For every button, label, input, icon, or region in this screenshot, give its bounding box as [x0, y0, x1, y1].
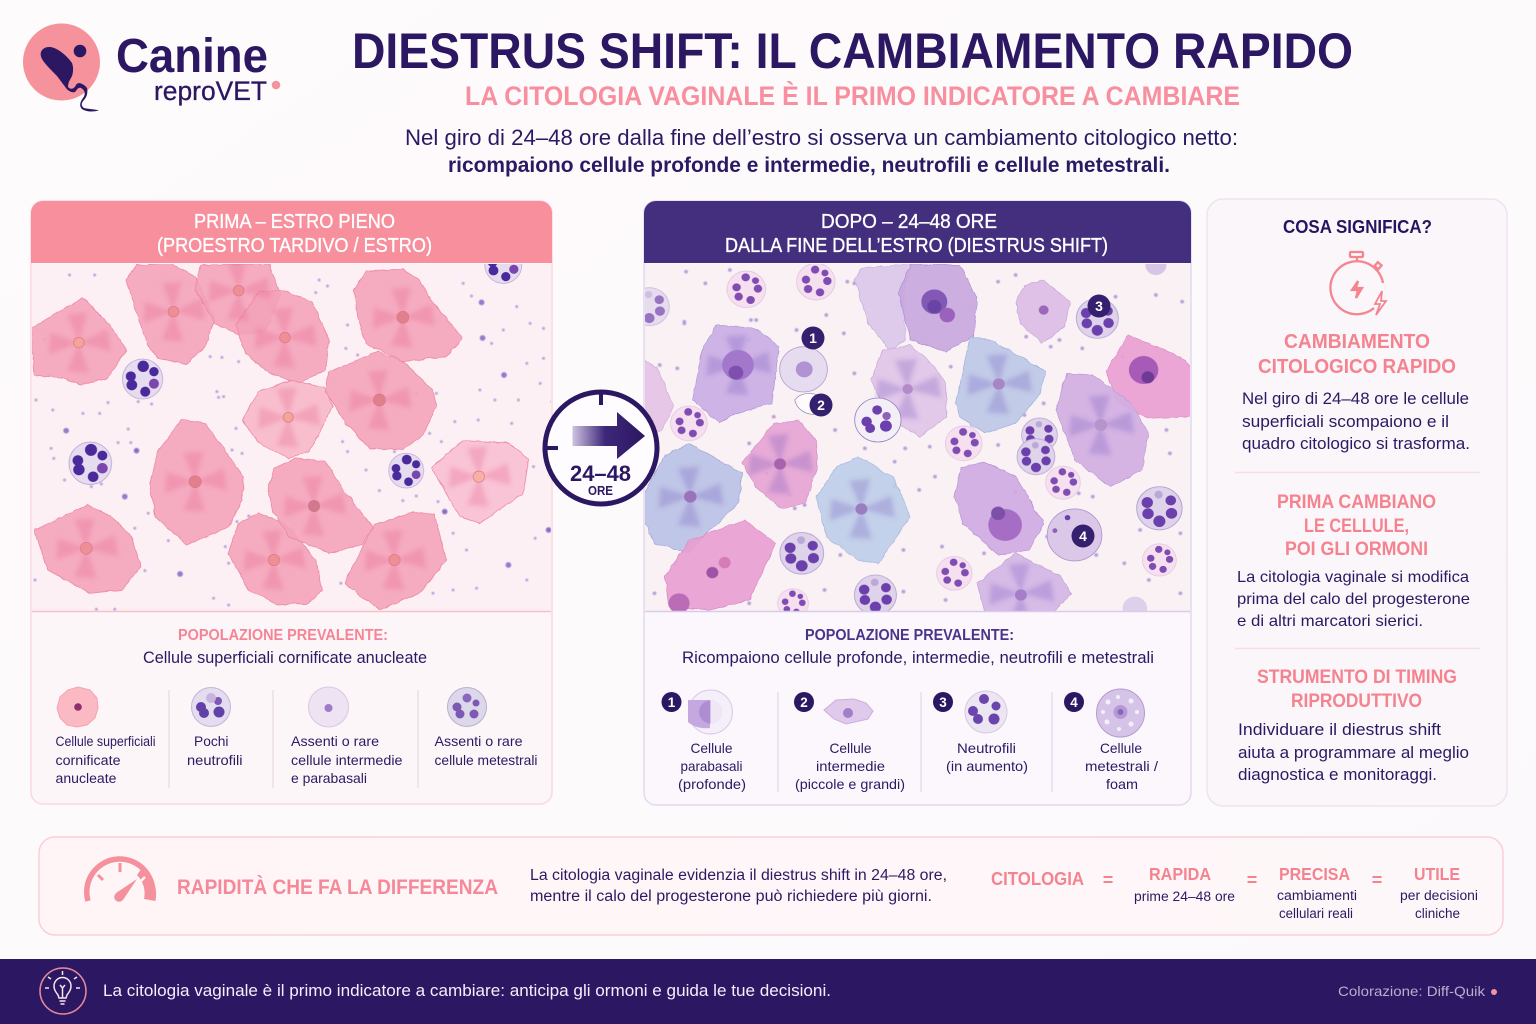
section: strumento di timing riproduttivo: aiuta a programmare al meglio [1238, 744, 1469, 762]
item 4: cellule metestrali / foam [1064, 689, 1158, 792]
prevalent population text: prima: Cellule superficiali cornificate anucleate [143, 649, 427, 667]
logo: Canine reproVET [23, 24, 280, 111]
item: cellule superficiali: Cellule superficiali [56, 734, 156, 749]
section: prima cambiano le cellule: PRIMA CAMBIANO [1277, 492, 1436, 513]
item: cellule superficiali [56, 687, 156, 786]
item 4: cellule metestrali / foam: foam [1106, 776, 1138, 792]
heading: cosa significa: COSA SIGNIFICA? [1283, 217, 1432, 237]
stain note: Colorazione: Diff-Quik [1338, 983, 1486, 999]
item 2: cellule intermedie: 2 [800, 695, 808, 710]
micrograph: superficial cornified cells [31, 247, 552, 611]
equation: citologia = rapida = precisa = utile: CITOLOGIA [991, 869, 1084, 889]
item: pochi neutrofili [187, 688, 242, 768]
item 3: neutrofili: 3 [939, 695, 947, 710]
item 2: cellule intermedie: intermedie [816, 758, 885, 774]
section: prima cambiano le cellule: LE CELLULE, [1304, 516, 1409, 537]
arrow: 24–48 ore timer: 24–48 [570, 461, 631, 486]
prevalent population text: dopo: Ricompaiono cellule profonde, intermedie, neutrofili e metestrali [682, 649, 1154, 667]
section: strumento di timing riproduttivo: Individuare il diestrus shift [1238, 721, 1441, 739]
footer bar [0, 959, 1536, 1024]
item: cellule superficiali: anucleate [56, 771, 116, 786]
item: assenti o rare intermedie e parabasali: e parabasali [291, 770, 367, 786]
item 1: cellule parabasali [662, 690, 746, 792]
equation: citologia = rapida = precisa = utile [991, 864, 1478, 921]
equation: citologia = rapida = precisa = utile: cliniche [1415, 906, 1460, 921]
item: pochi neutrofili: neutrofili [187, 752, 242, 768]
logo: Canine reproVET: reproVET [154, 76, 267, 106]
prevalent population text: dopo: POPOLAZIONE PREVALENTE: [805, 627, 1014, 644]
item 3: neutrofili [933, 691, 1028, 774]
item 3: neutrofili: (in aumento) [946, 758, 1028, 774]
equation: citologia = rapida = precisa = utile: = [1247, 870, 1257, 890]
section: strumento di timing riproduttivo [1238, 667, 1469, 784]
item: assenti o rare metestrali: Assenti o rare [434, 733, 523, 749]
panel header: dopo [644, 201, 1191, 263]
equation: citologia = rapida = precisa = utile: = [1372, 870, 1382, 890]
panel: prima – estro pieno [31, 201, 552, 804]
section: strumento di timing riproduttivo: STRUMENTO DI TIMING [1257, 667, 1457, 688]
micrograph: mixed cells in diestrus shift [629, 255, 1191, 623]
equation: citologia = rapida = precisa = utile: = [1103, 870, 1113, 890]
numbered markers on micrograph [802, 294, 1110, 548]
section: strumento di timing riproduttivo: RIPRODUTTIVO [1291, 691, 1422, 712]
prevalent population text: prima [143, 627, 427, 667]
icon: stopwatch with bolt [1330, 252, 1386, 315]
item 1: cellule parabasali: parabasali [680, 758, 742, 774]
banner text: mentre il calo del progesterone può richiedere più giorni. [530, 888, 932, 905]
section: prima cambiano le cellule: prima del calo del progesterone [1237, 591, 1470, 608]
item: pochi neutrofili: Pochi [194, 733, 228, 749]
numbered markers on micrograph: 1 [809, 330, 817, 346]
panel header: dopo: DALLA FINE DELL’ESTRO (DIESTRUS SHIFT) [725, 235, 1108, 257]
prevalent population text: dopo [682, 627, 1154, 667]
numbered markers on micrograph: 2 [817, 397, 825, 413]
numbered markers on micrograph: 4 [1079, 528, 1087, 544]
section: strumento di timing riproduttivo: diagnostica e monitoraggi. [1238, 766, 1437, 784]
panel: dopo – 24–48 ore [629, 201, 1191, 805]
item 2: cellule intermedie [794, 692, 905, 792]
numbered markers on micrograph: 3 [1095, 298, 1103, 314]
item: assenti o rare metestrali: cellule metestrali [434, 752, 538, 768]
intro text: ricompaiono cellule profonde e intermedie, neutrofili e cellule metestrali. [448, 153, 1170, 177]
banner: rapidità che fa la differenza [39, 837, 1503, 935]
subtitle: LA CITOLOGIA VAGINALE È IL PRIMO INDICATORE A CAMBIARE [465, 81, 1240, 111]
item: cellule superficiali: cornificate [56, 753, 120, 768]
icon: light bulb [40, 968, 86, 1014]
equation: citologia = rapida = precisa = utile: per decisioni [1400, 888, 1478, 903]
intro text [405, 125, 1238, 177]
section: prima cambiano le cellule [1237, 492, 1470, 630]
item 1: cellule parabasali: Cellule [690, 740, 733, 756]
section: prima cambiano le cellule: La citologia vaginale si modifica [1237, 569, 1469, 586]
item 4: cellule metestrali / foam: 4 [1070, 695, 1078, 710]
equation: citologia = rapida = precisa = utile: cambiamenti [1277, 888, 1357, 903]
item: assenti o rare intermedie e parabasali [291, 687, 403, 786]
equation: citologia = rapida = precisa = utile: UTILE [1414, 864, 1460, 884]
panel header: prima: PRIMA – ESTRO PIENO [194, 211, 395, 233]
equation: citologia = rapida = precisa = utile: cellulari reali [1279, 906, 1353, 921]
panel: cosa significa? [1207, 199, 1507, 806]
section: cambiamento citologico rapido: CITOLOGICO RAPIDO [1258, 356, 1456, 378]
item: assenti o rare metestrali [434, 688, 538, 768]
section: cambiamento citologico rapido: superficiali scompaiono e il [1242, 413, 1449, 431]
logo: Canine reproVET: Canine [116, 30, 268, 83]
section: cambiamento citologico rapido: CAMBIAMENTO [1284, 331, 1430, 353]
footer message: La citologia vaginale è il primo indicatore a cambiare: anticipa gli ormoni e guida le tue decisioni. [103, 981, 831, 1000]
section: prima cambiano le cellule: POI GLI ORMONI [1285, 539, 1428, 560]
equation: citologia = rapida = precisa = utile: prime 24–48 ore [1134, 889, 1235, 904]
title: DIESTRUS SHIFT: IL CAMBIAMENTO RAPIDO [352, 23, 1353, 79]
item 3: neutrofili: Neutrofili [957, 740, 1016, 756]
item: assenti o rare intermedie e parabasali: cellule intermedie [291, 752, 403, 768]
item 2: cellule intermedie: Cellule [830, 740, 872, 756]
arrow: 24–48 ore timer: ORE [588, 484, 613, 498]
banner text: La citologia vaginale evidenzia il diestrus shift in 24–48 ore, [530, 867, 947, 884]
banner heading: RAPIDITÀ CHE FA LA DIFFERENZA [177, 876, 498, 899]
section: cambiamento citologico rapido: quadro citologico si trasforma. [1242, 435, 1470, 453]
icon: speedometer [87, 859, 156, 902]
section: cambiamento citologico rapido: Nel giro di 24–48 ore le cellule [1242, 390, 1469, 408]
panel header: prima: (PROESTRO TARDIVO / ESTRO) [157, 235, 432, 257]
section: cambiamento citologico rapido [1242, 331, 1470, 453]
prevalent population text: prima: POPOLAZIONE PREVALENTE: [178, 627, 388, 644]
panel header: dopo: DOPO – 24–48 ORE [821, 211, 997, 233]
section: prima cambiano le cellule: e di altri marcatori sierici. [1237, 613, 1423, 630]
item 4: cellule metestrali / foam: Cellule [1100, 740, 1142, 756]
banner text [530, 867, 947, 905]
equation: citologia = rapida = precisa = utile: PRECISA [1279, 864, 1350, 884]
item 2: cellule intermedie: (piccole e grandi) [795, 776, 905, 792]
item 1: cellule parabasali: (profonde) [678, 776, 746, 792]
equation: citologia = rapida = precisa = utile: RAPIDA [1149, 864, 1211, 884]
item 4: cellule metestrali / foam: metestrali / [1085, 758, 1158, 774]
item 1: cellule parabasali: 1 [668, 695, 676, 710]
panel header: prima [31, 201, 552, 263]
arrow: 24–48 ore timer [545, 392, 657, 504]
item: assenti o rare intermedie e parabasali: Assenti o rare [291, 733, 379, 749]
intro text: Nel giro di 24–48 ore dalla fine dell’estro si osserva un cambiamento citologico netto: [405, 125, 1238, 150]
